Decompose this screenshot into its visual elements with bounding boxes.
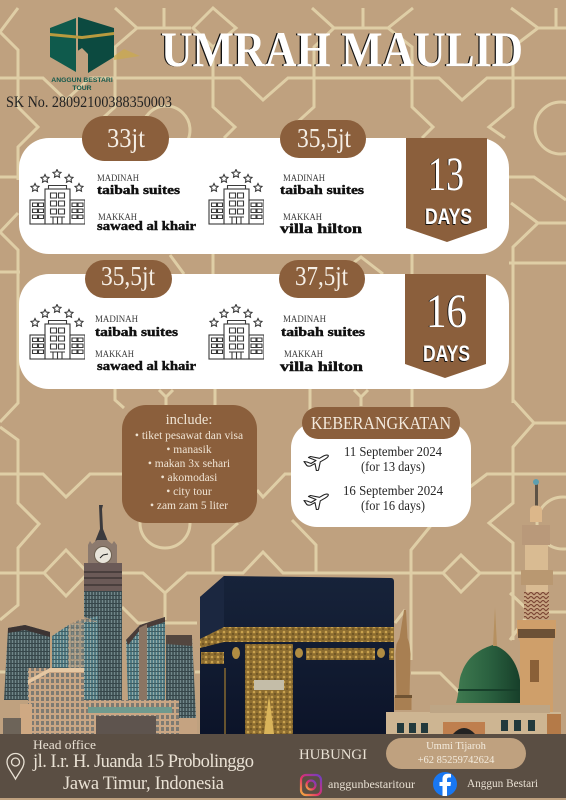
- date 2: (for 16 days): [361, 499, 425, 514]
- price pill: 35,5jt: 35,5jt: [297, 123, 351, 153]
- panel: include list: • makan 3x sehari: [148, 458, 230, 470]
- hotel names left: MADINAH: [97, 173, 139, 183]
- panel: include list: include:: [166, 412, 212, 428]
- footer bar: [0, 734, 566, 798]
- hotel names right: MADINAH: [283, 314, 326, 324]
- icon: facebook: [433, 772, 457, 796]
- hotel names left: sawaed al khair: [97, 358, 196, 373]
- ribbon: 13 days: 13: [428, 148, 464, 201]
- upper inscription band: [306, 648, 375, 660]
- date 2: 16 September 2024: [343, 484, 443, 499]
- address: Head office: [33, 737, 96, 752]
- illustration: prophet's mosque: [386, 479, 561, 734]
- title: UMRAH MAULID: [161, 21, 523, 77]
- card background: [19, 138, 509, 254]
- address: jl. I.r. H. Juanda 15 Probolinggo: [32, 752, 254, 772]
- hotel names right: villa hilton: [280, 222, 362, 237]
- hotel names right: MAKKAH: [283, 212, 322, 222]
- contact pill: [386, 738, 526, 769]
- card background: [19, 274, 509, 389]
- licence number: SK No. 28092100388350003: [6, 94, 172, 111]
- right towers: [126, 617, 165, 700]
- hotel names right: MADINAH: [283, 173, 325, 183]
- ribbon: 16 days: [405, 274, 486, 378]
- date 1: [344, 445, 442, 475]
- address: Jawa Timur, Indonesia: [63, 774, 224, 794]
- icon: instagram: [301, 775, 321, 795]
- panel: include list: [122, 405, 257, 523]
- panel: include list: • tiket pesawat dan visa: [135, 430, 243, 442]
- logo: [50, 17, 140, 92]
- icon: plane: [304, 494, 328, 510]
- ribbon: 13 days: DAYS: [425, 204, 472, 229]
- icon: hotel: [30, 304, 85, 359]
- panel: departure dates: [291, 407, 471, 527]
- hotel names right: MAKKAH: [284, 349, 323, 359]
- ribbon: 13 days: [406, 138, 487, 242]
- green dome: [456, 607, 520, 703]
- icon: hotel: [209, 170, 264, 224]
- panel: include list: • akomodasi: [161, 472, 217, 484]
- price pill: 35,5jt: 35,5jt: [101, 261, 155, 291]
- heading pill: KEBERANGKATAN: [311, 413, 451, 433]
- panel: include list: • manasik: [166, 444, 212, 456]
- icon: hotel: [209, 304, 264, 359]
- price pill: 37,5jt: 37,5jt: [295, 261, 348, 291]
- illustration: clock tower complex: [3, 505, 197, 734]
- side medallions: [201, 652, 224, 664]
- date 1: (for 13 days): [361, 460, 425, 475]
- illustration: kaaba: [200, 576, 394, 734]
- address: [32, 737, 254, 794]
- hotel names left: MAKKAH: [95, 349, 134, 359]
- date 1: 11 September 2024: [344, 445, 442, 460]
- logo: TOUR: [72, 85, 92, 92]
- hotel names left: sawaed al khair: [97, 218, 196, 233]
- small minaret: [394, 610, 412, 710]
- large minaret: [517, 479, 556, 712]
- hotel names left: MAKKAH: [98, 212, 137, 222]
- price pill: 35,5jt: [280, 120, 366, 158]
- heading pill: [302, 407, 460, 439]
- price pill: 35,5jt: [85, 260, 172, 298]
- facebook name: Anggun Bestari: [467, 778, 538, 790]
- icon: location pin: [7, 754, 24, 779]
- contact pill: +62 85259742624: [418, 755, 495, 766]
- contact heading: HUBUNGI: [299, 747, 367, 763]
- hotel names right: taibah suites: [280, 182, 364, 197]
- door panel: [245, 644, 293, 734]
- hotel names right: villa hilton: [280, 360, 363, 375]
- icon: plane: [304, 455, 328, 471]
- podium buildings: [28, 668, 84, 734]
- hotel names right: [280, 173, 364, 237]
- ribbon: 16 days: DAYS: [423, 341, 470, 366]
- hotel names left: taibah suites: [95, 324, 178, 339]
- left towers: [4, 625, 50, 700]
- logo name: ANGGUN BESTARI: [51, 77, 113, 84]
- hotel names left: [97, 173, 196, 233]
- panel: include list: • city tour: [166, 486, 212, 498]
- contact pill: Ummi Tijaroh: [426, 741, 487, 752]
- hotel names right: [280, 314, 365, 375]
- hotel names right: taibah suites: [281, 324, 365, 339]
- hotel names left: [95, 314, 196, 373]
- price pill: 33jt: [82, 116, 169, 161]
- panel: 13 days packages: [19, 116, 509, 254]
- logo mark: kaaba: [50, 18, 76, 72]
- price pill: 37,5jt: [279, 260, 365, 298]
- ribbon: 16 days: 16: [426, 285, 467, 338]
- mosque base: [386, 705, 561, 734]
- icon: hotel: [30, 170, 85, 224]
- date 2: [343, 484, 443, 514]
- price pill: 33jt: 33jt: [107, 123, 145, 153]
- panel: 16 days packages: [19, 260, 509, 389]
- panel: include list: • zam zam 5 liter: [150, 500, 228, 512]
- hotel names left: MADINAH: [95, 314, 138, 324]
- instagram handle: anggunbestaritour: [328, 779, 415, 791]
- hotel names left: taibah suites: [97, 182, 180, 197]
